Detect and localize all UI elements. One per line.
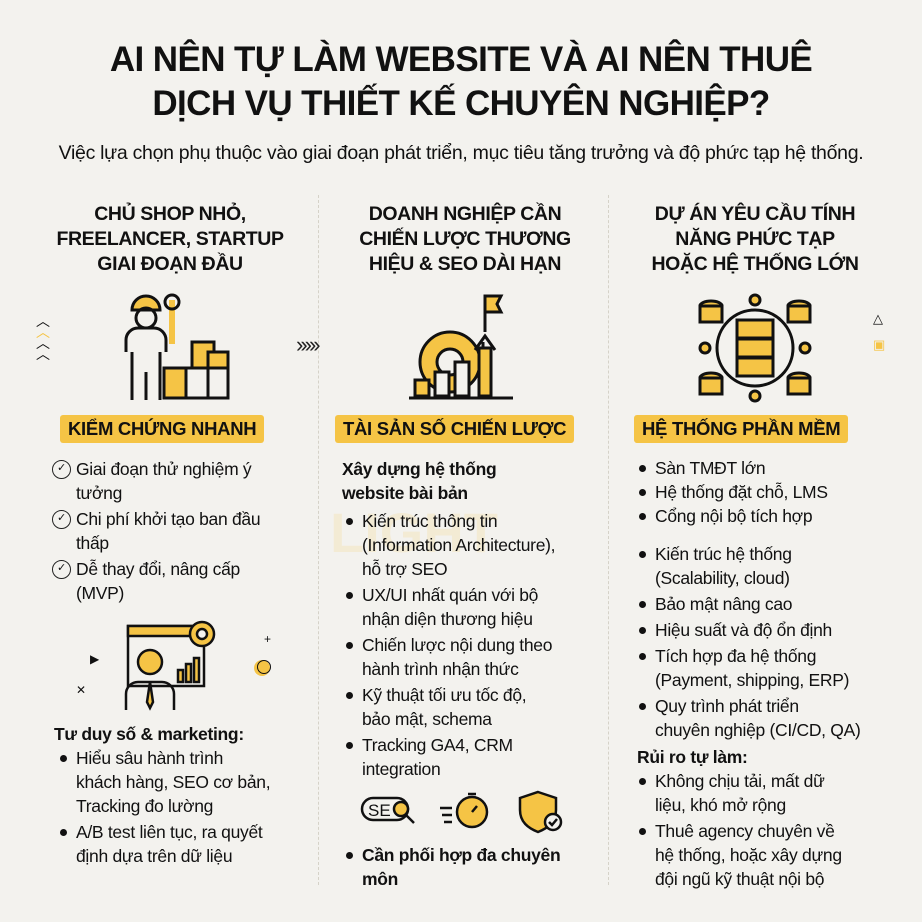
column 2 list: integration bbox=[362, 759, 440, 779]
column 2 list: bảo mật, schema bbox=[362, 709, 492, 729]
icon: worker with wrench and blocks bbox=[124, 294, 230, 400]
column 3 list bbox=[639, 458, 861, 740]
column 3 list: chuyên nghiệp (CI/CD, QA) bbox=[655, 720, 861, 740]
decoration: chevrons left: ︿ bbox=[36, 313, 50, 329]
column 2 list: website bài bản bbox=[342, 483, 468, 503]
text: ✕ bbox=[76, 683, 86, 697]
column 3 risks: Không chịu tải, mất dữ bbox=[655, 771, 825, 791]
column 2 list: nhận diện thương hiệu bbox=[362, 609, 533, 629]
column 1 marketing block: Tracking đo lường bbox=[76, 796, 213, 816]
column 1 checklist: (MVP) bbox=[76, 583, 124, 603]
title: AI NÊN TỰ LÀM WEBSITE VÀ AI NÊN THUÊ bbox=[110, 40, 812, 79]
column 2 heading: HIỆU & SEO DÀI HẠN bbox=[369, 253, 561, 275]
column 3 heading: DỰ ÁN YÊU CẦU TÍNH bbox=[655, 203, 855, 225]
column 2 list: Xây dựng hệ thống bbox=[342, 459, 496, 479]
text: + bbox=[264, 632, 271, 646]
column 1 checklist: Chi phí khởi tạo ban đầu bbox=[76, 509, 260, 529]
column 1 marketing block: A/B test liên tục, ra quyết bbox=[76, 822, 262, 842]
column 3 risks: liệu, khó mở rộng bbox=[655, 795, 786, 815]
title: DỊCH VỤ THIẾT KẾ CHUYÊN NGHIỆP? bbox=[152, 84, 770, 123]
column 3 list: (Scalability, cloud) bbox=[655, 568, 790, 588]
badge 1 bbox=[60, 415, 264, 443]
badge 3: HỆ THỐNG PHẦN MỀM bbox=[642, 418, 840, 439]
icons: SEO, stopwatch, shield bbox=[360, 790, 562, 834]
badge 3 bbox=[634, 415, 848, 443]
column 1 checklist: Dễ thay đổi, nâng cấp bbox=[76, 559, 240, 579]
column 2 list: Chiến lược nội dung theo bbox=[362, 635, 552, 655]
column 3 risks: hệ thống, hoặc xây dựng bbox=[655, 845, 842, 865]
column 2 list: Tracking GA4, CRM bbox=[362, 735, 513, 755]
column 3 risks: Thuê agency chuyên về bbox=[655, 821, 835, 841]
column 3 list: Kiến trúc hệ thống bbox=[655, 544, 792, 564]
column 1 heading: CHỦ SHOP NHỎ, bbox=[94, 203, 246, 225]
icon: gear with growth chart bbox=[409, 294, 513, 400]
decoration: chevrons left: ︿ bbox=[36, 324, 50, 340]
column 3 list: Bảo mật nâng cao bbox=[655, 594, 792, 614]
column 3 list: Cổng nội bộ tích hợp bbox=[655, 506, 812, 526]
badge 2: TÀI SẢN SỐ CHIẾN LƯỢC bbox=[343, 418, 566, 439]
column 2 closing bullet: Cần phối hợp đa chuyên bbox=[362, 845, 560, 865]
column 2 closing bullet: môn bbox=[362, 869, 398, 889]
decoration: triangle and square: ▣ bbox=[873, 337, 885, 352]
column 2 list: (Information Architecture), bbox=[362, 535, 555, 555]
column 3 risks bbox=[637, 747, 842, 889]
column 1 checklist: Giai đoạn thử nghiệm ý bbox=[76, 459, 251, 479]
decoration: chevrons left: ︿ bbox=[36, 335, 50, 351]
column 3 list: Quy trình phát triển bbox=[655, 696, 799, 716]
decoration: triangle and square bbox=[873, 311, 885, 352]
column 3 heading bbox=[652, 202, 858, 275]
column 1 marketing block: Tư duy số & marketing: bbox=[54, 724, 244, 744]
badge 1: KIỂM CHỨNG NHANH bbox=[68, 418, 256, 439]
column 1 checklist: tưởng bbox=[76, 483, 122, 503]
subtitle: Việc lựa chọn phụ thuộc vào giai đoạn phát triển, mục tiêu tăng trưởng và độ phức tạp hệ thống. bbox=[59, 142, 863, 164]
column 1 marketing block: khách hàng, SEO cơ bản, bbox=[76, 772, 270, 792]
column 1 marketing block: Hiểu sâu hành trình bbox=[76, 748, 223, 768]
decoration: arrows: ››››› bbox=[296, 332, 318, 357]
column 1 heading: FREELANCER, STARTUP bbox=[56, 228, 284, 250]
icons: SEO, stopwatch, shield: SE bbox=[368, 801, 391, 820]
column 2 list: Kiến trúc thông tin bbox=[362, 511, 497, 531]
column 1 checklist: thấp bbox=[76, 533, 109, 553]
column 3 list: Hiệu suất và độ ổn định bbox=[655, 620, 832, 640]
column 2 heading: CHIẾN LƯỢC THƯƠNG bbox=[359, 228, 571, 250]
column 2 heading bbox=[359, 202, 571, 275]
column 2 list: hỗ trợ SEO bbox=[362, 559, 447, 579]
column 1 marketing block bbox=[54, 724, 270, 866]
column 3 risks: Rủi ro tự làm: bbox=[637, 747, 748, 767]
decoration: chevrons left bbox=[36, 313, 50, 362]
icon: person with dashboard bbox=[124, 620, 216, 711]
column 3 list: (Payment, shipping, ERP) bbox=[655, 670, 849, 690]
badge 2 bbox=[335, 415, 574, 443]
column 2 closing bullet bbox=[346, 845, 560, 889]
column 3 heading: NĂNG PHỨC TẠP bbox=[675, 228, 835, 250]
column 2 list bbox=[342, 459, 555, 779]
decoration: triangle and square: △ bbox=[873, 311, 883, 326]
column 3 list: Sàn TMĐT lớn bbox=[655, 458, 765, 478]
column 3 risks: đội ngũ kỹ thuật nội bộ bbox=[655, 869, 824, 889]
column 1 marketing block: định dựa trên dữ liệu bbox=[76, 846, 232, 866]
decoration: small shapes: ▶ bbox=[90, 652, 99, 666]
column 2 heading: DOANH NGHIỆP CẦN bbox=[369, 203, 561, 225]
column 1 heading bbox=[56, 202, 284, 275]
column 2 list: hành trình nhận thức bbox=[362, 659, 519, 679]
column 1 heading: GIAI ĐOẠN ĐẦU bbox=[97, 253, 243, 275]
column 2 list: UX/UI nhất quán với bộ bbox=[362, 585, 538, 605]
icon: server network bbox=[698, 294, 812, 402]
watermark: LIGHT bbox=[330, 501, 498, 564]
column 3 heading: HOẶC HỆ THỐNG LỚN bbox=[652, 253, 858, 275]
column 3 list: Hệ thống đặt chỗ, LMS bbox=[655, 482, 828, 502]
column 1 checklist bbox=[52, 459, 260, 603]
column 2 list: Kỹ thuật tối ưu tốc độ, bbox=[362, 685, 526, 705]
title bbox=[110, 39, 812, 123]
column 3 list: Tích hợp đa hệ thống bbox=[655, 646, 816, 666]
decoration: chevrons left: ︿ bbox=[36, 346, 50, 362]
